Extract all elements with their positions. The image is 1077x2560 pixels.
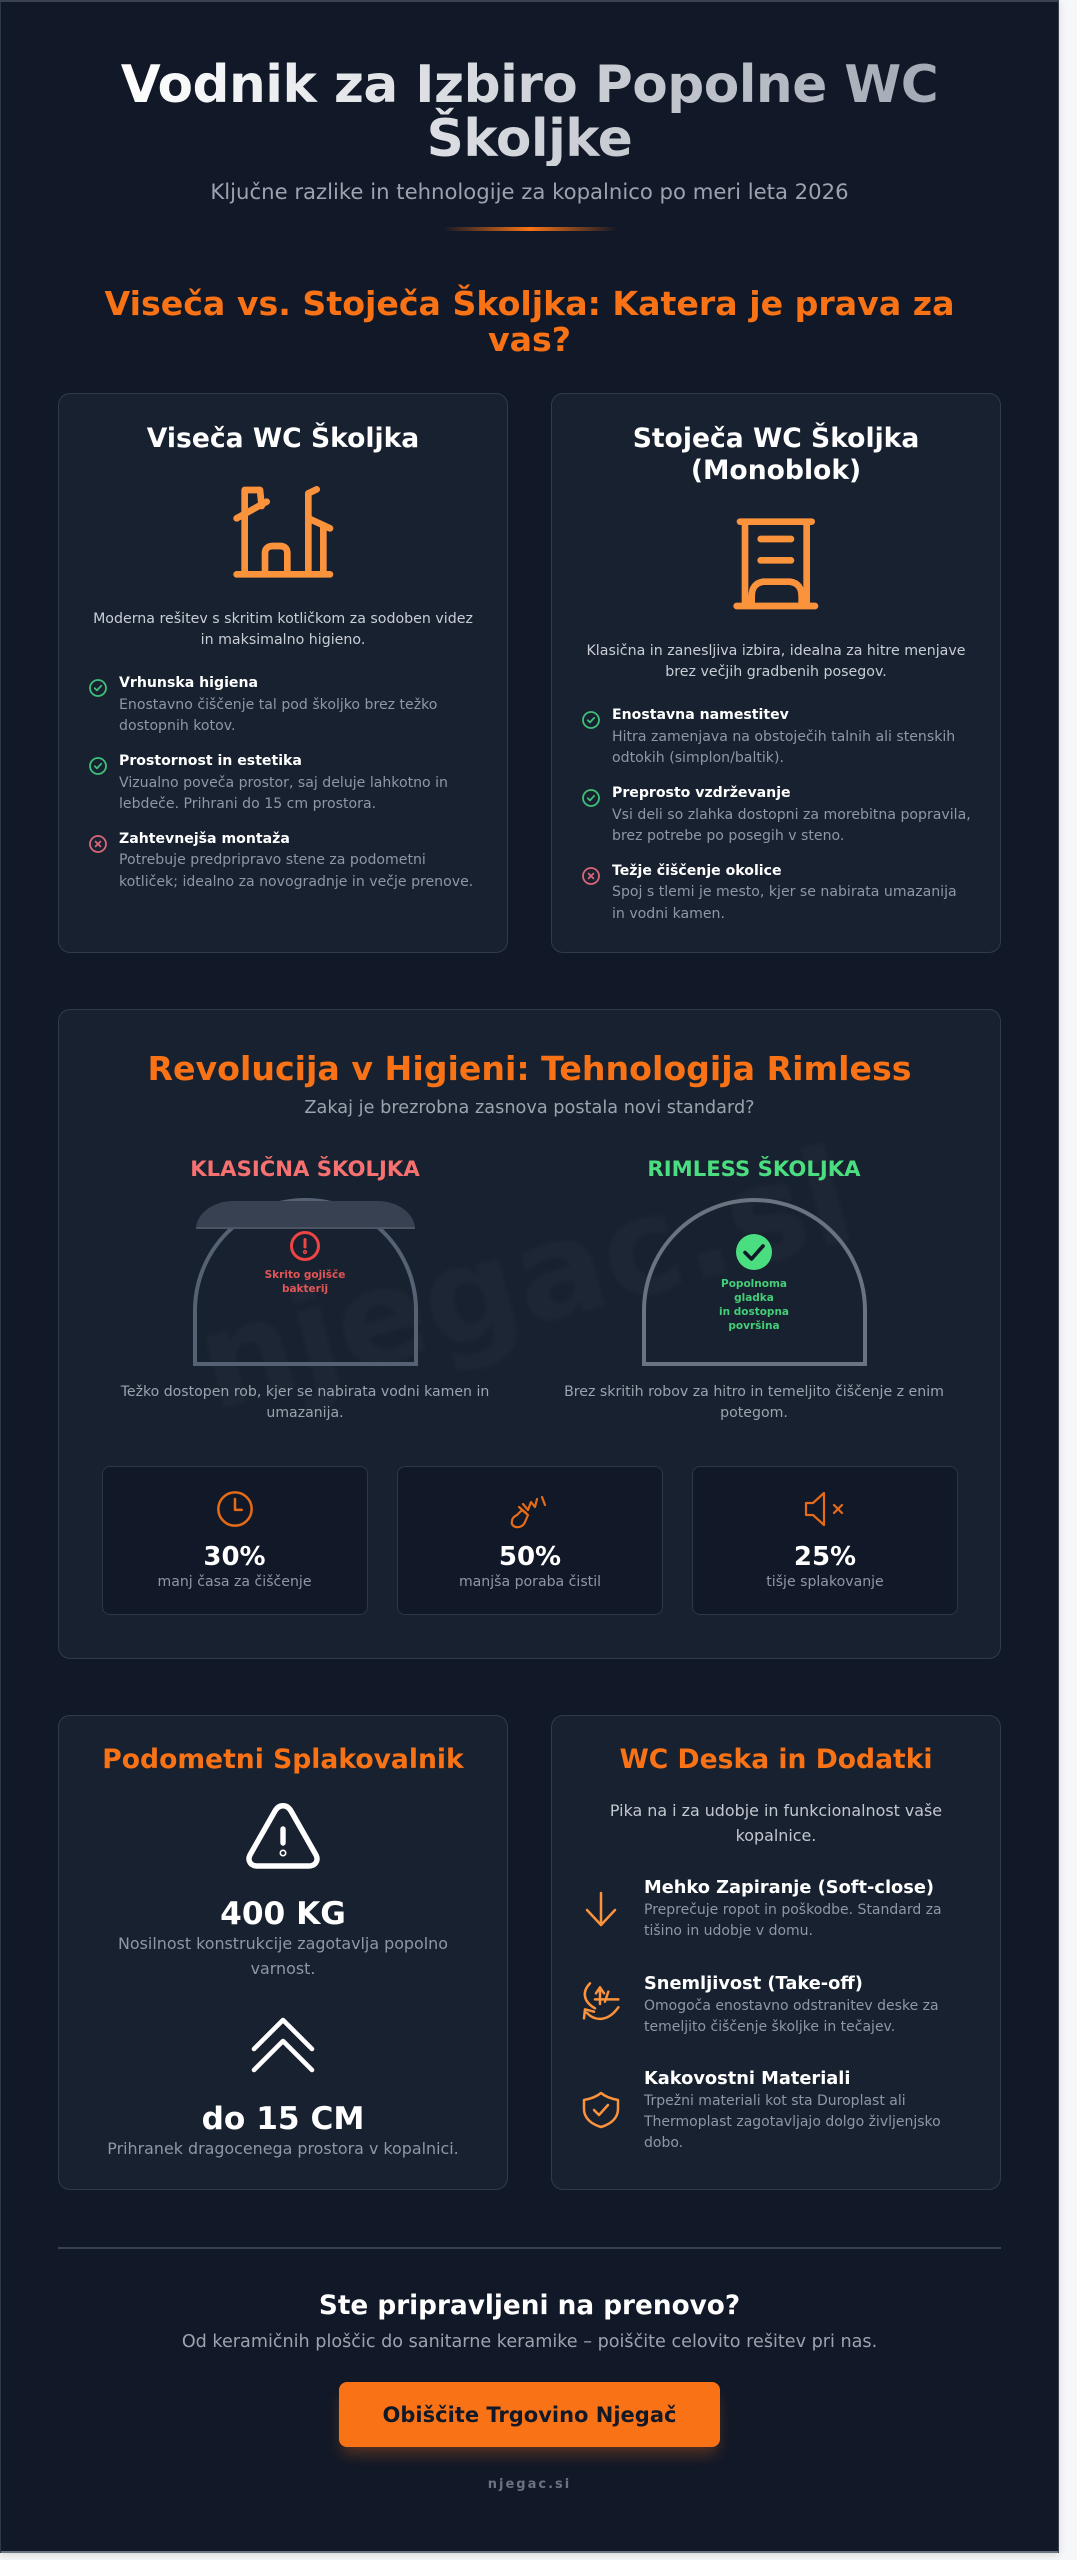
classic heading: KLASIČNA ŠKOLJKA bbox=[190, 1156, 420, 1181]
rimless callout bbox=[719, 1278, 789, 1332]
pro: spaciousness: Prostornost in estetika bbox=[119, 753, 302, 769]
classic callout: bakterij bbox=[282, 1283, 328, 1295]
classic caption: Težko dostopen rob, kjer se nabirata vodni kamen in bbox=[121, 1384, 489, 1400]
watermark: njegac.si bbox=[182, 1119, 868, 1441]
stat: cleaning time bbox=[102, 1466, 368, 1615]
rimless callout: Popolnoma bbox=[721, 1278, 787, 1290]
panel description: Moderna rešitev s skritim kotličkom za sodoben videz bbox=[93, 611, 473, 627]
orange divider bbox=[443, 227, 617, 231]
heading: wall-hung vs floor-standing: vas? bbox=[488, 320, 571, 358]
stat value: 50% bbox=[499, 1542, 561, 1572]
panel: concealed cistern bbox=[58, 1715, 508, 2190]
pro: simple maintenance: Vsi deli so zlahka dostopni za morebitna popravila, bbox=[612, 807, 971, 823]
panel heading: Stoječa WC Školjka bbox=[633, 423, 919, 454]
stat label: tišje splakovanje bbox=[766, 1574, 884, 1590]
panel heading: (Monoblok) bbox=[691, 455, 861, 486]
comparison: rimless toilet bbox=[564, 1156, 944, 1421]
icon: check bbox=[736, 1234, 772, 1270]
call to action button: Obiščite Trgovino Njegač bbox=[383, 2402, 676, 2426]
subtitle: Ključne razlike in tehnologije za kopalnico po meri leta 2026 bbox=[210, 179, 849, 204]
call to action button bbox=[339, 2382, 720, 2447]
pro: easy installation: odtokih (simplon/baltik). bbox=[612, 750, 784, 766]
comparison: classic toilet bbox=[120, 1156, 489, 1421]
panel: wall-hung toilet bbox=[58, 393, 508, 953]
panel subheading: Zakaj je brezrobna zasnova postala novi standard? bbox=[304, 1098, 755, 1118]
stat label: manjša poraba čistil bbox=[459, 1574, 601, 1590]
panel description: brez večjih gradbenih posegov. bbox=[665, 664, 887, 680]
brand footer: njegac.si bbox=[488, 2476, 571, 2492]
stat: detergent use bbox=[397, 1466, 663, 1615]
panel description: in maksimalno higieno. bbox=[201, 632, 365, 648]
title bbox=[58, 58, 1001, 166]
call to action heading: Ste pripravljeni na prenovo? bbox=[319, 2291, 740, 2321]
panel: floor-standing toilet bbox=[551, 393, 1001, 953]
stat value: 30% bbox=[203, 1542, 266, 1572]
con: harder cleaning bbox=[582, 863, 957, 922]
classic caption bbox=[120, 1384, 489, 1421]
pro: top hygiene: Vrhunska higiena bbox=[119, 675, 258, 691]
con: demanding installation: Potrebuje predpripravo stene za podometni bbox=[119, 852, 426, 868]
icon: warning triangle bbox=[246, 1803, 320, 1869]
pro: simple maintenance: Preprosto vzdrževanje bbox=[612, 785, 791, 801]
heading: wall-hung vs floor-standing bbox=[104, 284, 954, 358]
space description: Prihranek dragocenega prostora v kopalnici. bbox=[107, 2139, 459, 2158]
con: harder cleaning: Težje čiščenje okolice bbox=[612, 863, 782, 879]
panel heading: Viseča WC Školjka bbox=[147, 423, 419, 454]
panel description bbox=[610, 1801, 942, 1845]
classic bowl outline bbox=[193, 1198, 418, 1366]
panel description bbox=[586, 643, 966, 680]
classic caption: umazanija. bbox=[266, 1405, 344, 1421]
panel: rimless technology bbox=[58, 1009, 1001, 1659]
pro: spaciousness bbox=[89, 753, 448, 812]
feature text bbox=[644, 2093, 941, 2151]
con: harder cleaning: in vodni kamen. bbox=[612, 906, 725, 922]
load value: 400 KG bbox=[220, 1896, 346, 1932]
icon: alert bbox=[290, 1231, 320, 1261]
rimless callout: gladka bbox=[734, 1292, 774, 1304]
feature: soft-close bbox=[586, 1877, 942, 1939]
title: Vodnik za Izbiro Popolne WC bbox=[121, 55, 938, 115]
feature title: Kakovostni Materiali bbox=[644, 2068, 850, 2089]
icon: take-off arrows bbox=[582, 1982, 620, 2020]
con: demanding installation: Zahtevnejša montaža bbox=[119, 831, 290, 847]
feature text: Preprečuje ropot in poškodbe. Standard za bbox=[644, 1902, 942, 1918]
pro: top hygiene: dostopnih kotov. bbox=[119, 718, 235, 734]
rimless callout: in dostopna bbox=[719, 1306, 789, 1318]
pro: top hygiene bbox=[89, 675, 437, 734]
panel heading bbox=[633, 422, 919, 486]
pro: easy installation: Enostavna namestitev bbox=[612, 707, 789, 723]
panel description: Klasična in zanesljiva izbira, idealna za hitre menjave bbox=[586, 643, 966, 659]
classic callout bbox=[265, 1269, 345, 1295]
con: harder cleaning: Spoj s tlemi je mesto, kjer se nabirata umazanija bbox=[612, 884, 957, 900]
icon: monoblock toilet bbox=[733, 518, 818, 610]
feature text: Trpežni materiali kot sta Duroplast ali bbox=[644, 2093, 906, 2109]
panel heading: Revolucija v Higieni: Tehnologija Rimless bbox=[147, 1049, 912, 1088]
feature text: Omogoča enostavno odstranitev deske za bbox=[644, 1998, 939, 2014]
pro: easy installation bbox=[582, 707, 955, 766]
icon: clock bbox=[217, 1491, 253, 1527]
rimless bowl outline bbox=[642, 1198, 867, 1366]
feature text: tišino in udobje v domu. bbox=[644, 1923, 813, 1939]
classic rim overhang bbox=[196, 1201, 415, 1229]
con: demanding installation: kotliček; idealno za novogradnje in večje prenove. bbox=[119, 874, 473, 890]
icon: double chevron up bbox=[252, 2018, 314, 2072]
rimless heading: RIMLESS ŠKOLJKA bbox=[647, 1156, 861, 1181]
icon: muted speaker bbox=[804, 1492, 844, 1526]
rimless caption: Brez skritih robov za hitro in temeljito čiščenje z enim bbox=[564, 1384, 944, 1400]
rimless callout: površina bbox=[728, 1320, 780, 1332]
rimless caption bbox=[564, 1384, 944, 1421]
space value: do 15 CM bbox=[202, 2100, 364, 2136]
pro: top hygiene: Enostavno čiščenje tal pod školjko brez težko bbox=[119, 697, 437, 713]
rimless caption: potegom. bbox=[720, 1405, 788, 1421]
title: Školjke bbox=[427, 109, 632, 169]
icon: arrow down bbox=[586, 1892, 616, 1926]
panel: seat and accessories bbox=[551, 1715, 1001, 2190]
pro: spaciousness: lebdeče. Prihrani do 15 cm prostora. bbox=[119, 796, 376, 812]
con: demanding installation bbox=[89, 831, 473, 890]
panel description: Pika na i za udobje in funkcionalnost vaše bbox=[610, 1801, 942, 1820]
feature text bbox=[644, 1998, 939, 2035]
call to action text: Od keramičnih ploščic do sanitarne keramike – poiščite celovito rešitev pri nas. bbox=[182, 2332, 877, 2352]
pro: easy installation: Hitra zamenjava na obstoječih talnih ali stenskih bbox=[612, 729, 955, 745]
stat: quieter flush bbox=[692, 1466, 958, 1615]
panel heading: WC Deska in Dodatki bbox=[619, 1744, 933, 1775]
load description bbox=[118, 1934, 448, 1978]
heading: wall-hung vs floor-standing: Viseča vs. Stoječa Školjka: Katera je prava za bbox=[105, 284, 954, 322]
load description: varnost. bbox=[251, 1959, 315, 1978]
icon: brush bbox=[510, 1496, 546, 1528]
classic callout: Skrito gojišče bbox=[265, 1269, 345, 1281]
footer divider bbox=[58, 2247, 1001, 2249]
stat label: manj časa za čiščenje bbox=[158, 1574, 312, 1590]
feature title: Snemljivost (Take-off) bbox=[644, 1973, 863, 1994]
panel description: kopalnice. bbox=[736, 1826, 816, 1845]
pro: simple maintenance bbox=[582, 785, 971, 844]
panel heading: Podometni Splakovalnik bbox=[102, 1744, 464, 1775]
feature text: temeljito čiščenje školjke in tečajev. bbox=[644, 2019, 895, 2035]
panel description bbox=[93, 611, 473, 648]
icon: shield check bbox=[582, 2092, 620, 2128]
stat value: 25% bbox=[794, 1542, 856, 1572]
pro: spaciousness: Vizualno poveča prostor, saj deluje lahkotno in bbox=[119, 775, 448, 791]
feature title: Mehko Zapiranje (Soft-close) bbox=[644, 1877, 934, 1898]
load description: Nosilnost konstrukcije zagotavlja popolno bbox=[118, 1934, 448, 1953]
icon: wall-hung toilet bbox=[233, 486, 334, 578]
feature: materials bbox=[582, 2068, 941, 2151]
feature: take-off bbox=[582, 1973, 939, 2035]
feature text: dobo. bbox=[644, 2135, 683, 2151]
feature text bbox=[644, 1902, 942, 1939]
feature text: Thermoplast zagotavljajo dolgo življenjsko bbox=[644, 2114, 941, 2130]
pro: simple maintenance: brez potrebe po posegih v steno. bbox=[612, 828, 844, 844]
